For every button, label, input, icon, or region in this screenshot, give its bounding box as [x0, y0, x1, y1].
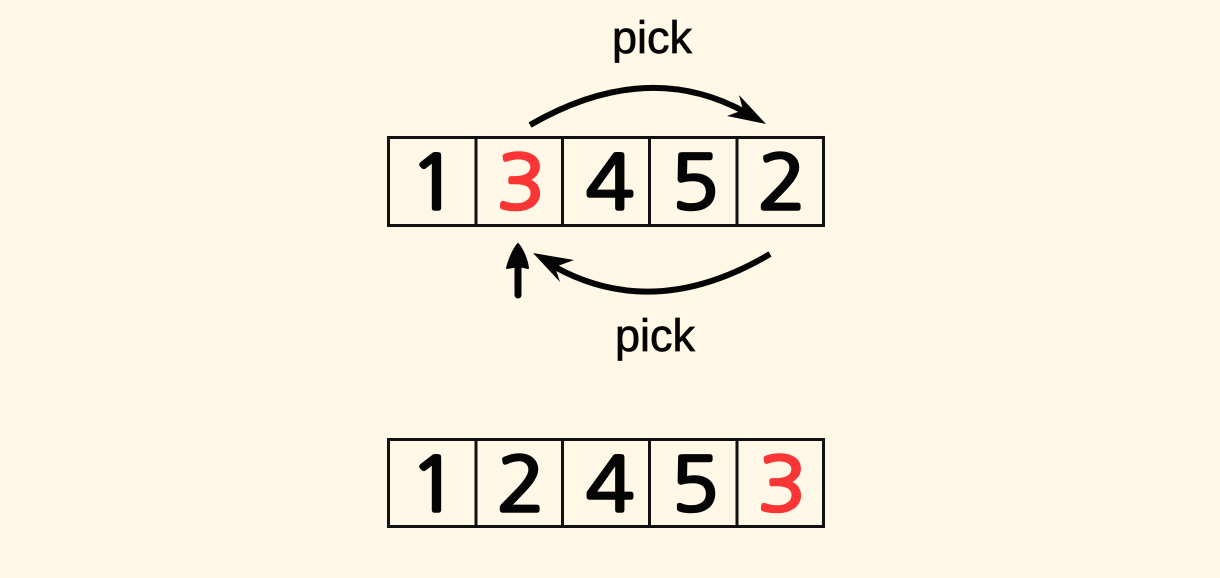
array: after swap: 3 — [758, 449, 806, 523]
arrow: top curve from 3 to 2 — [530, 88, 766, 125]
array: before swap: 1 — [410, 147, 458, 221]
array: after swap: 2 — [497, 449, 545, 523]
array: before swap: 3 — [497, 147, 545, 221]
array: after swap: 5 — [671, 449, 719, 523]
arrow: bottom curve from 2 to 3 — [533, 253, 770, 292]
array: after swap: 1 — [410, 449, 458, 523]
label: top pick: pick — [612, 12, 693, 63]
array: after swap: 4 — [586, 449, 634, 523]
array: before swap — [388, 137, 824, 226]
array: after swap — [388, 439, 824, 527]
array: before swap: 5 — [671, 147, 719, 221]
arrow: small up pointer — [507, 244, 528, 295]
array: before swap: 4 — [586, 147, 634, 221]
label: bottom pick: pick — [615, 310, 696, 361]
array: before swap: 2 — [758, 147, 806, 221]
